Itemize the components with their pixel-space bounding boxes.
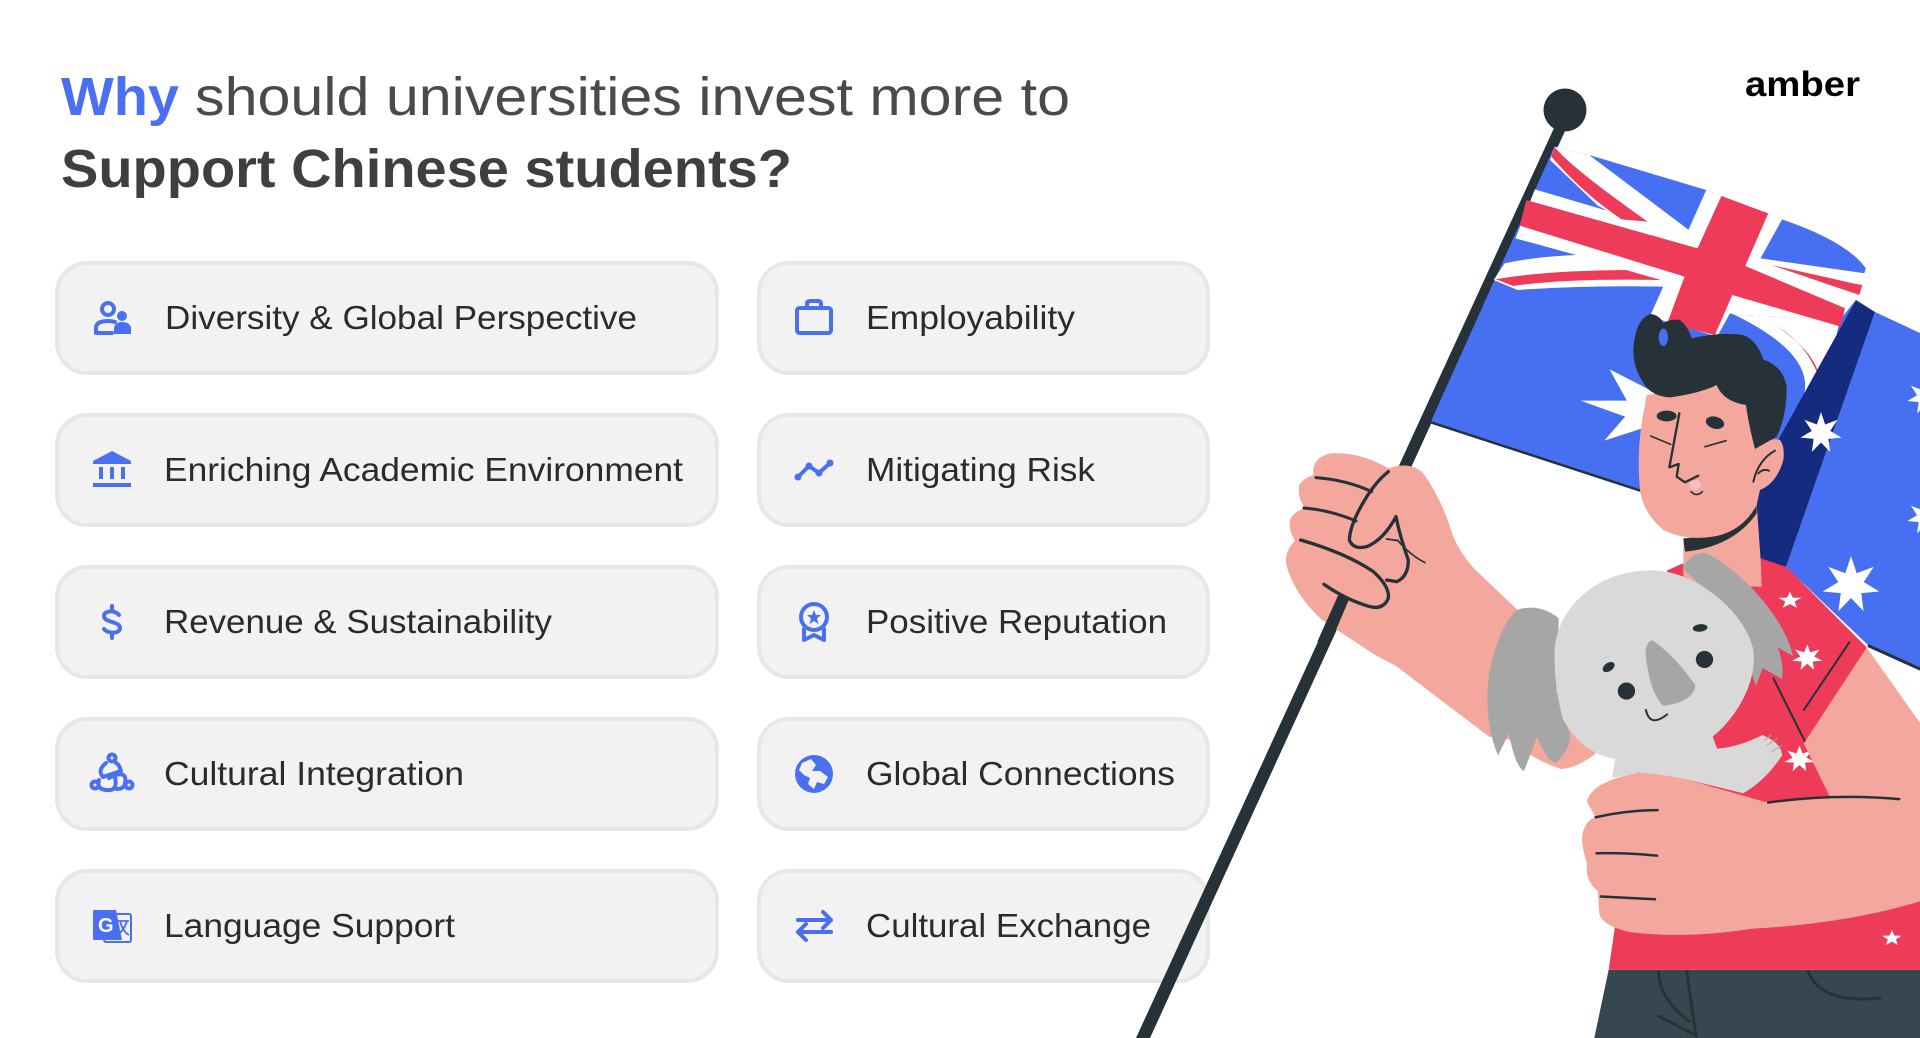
- icon: trend line: [794, 460, 834, 480]
- flag navy strip and stars: [1756, 300, 1920, 669]
- icon: award: [801, 604, 827, 640]
- head: face, hair and neck: [1633, 314, 1787, 587]
- shirt and pants: [1593, 558, 1920, 1038]
- panel: Cultural Exchange: Cultural Exchange: [866, 907, 1151, 944]
- koala: [1487, 553, 1793, 793]
- nose, wink and mouth lines: [1651, 413, 1775, 494]
- icon: globe: [795, 755, 833, 793]
- panel: Enriching Academic Environment: [57, 415, 717, 525]
- panel: Mitigating Risk: Mitigating Risk: [866, 451, 1096, 488]
- koala head and body: [1554, 570, 1782, 793]
- panel: Global Connections: Global Connections: [866, 755, 1175, 792]
- koala left ear: [1487, 608, 1570, 771]
- icon: dollar: [104, 606, 120, 638]
- panel: Cultural Integration: [57, 719, 717, 829]
- finger lines: [1301, 472, 1425, 607]
- flag main section with union jack: [1431, 147, 1866, 510]
- illustration: student with flag and koala: [1136, 88, 1920, 1038]
- panel: Revenue & Sustainability: Revenue & Sustainability: [164, 603, 553, 640]
- right arm and hand holding koala: [1582, 647, 1920, 935]
- panel: Cultural Integration: Cultural Integration: [164, 755, 464, 792]
- panel: Enriching Academic Environment: Enriching Academic Environment: [164, 451, 683, 488]
- panel: Cultural Exchange: [759, 871, 1208, 981]
- icon: exchange arrows: [798, 912, 831, 940]
- icon: knot: [92, 754, 132, 790]
- pole in front of palm: [1317, 593, 1349, 644]
- logo: amber: amber: [1745, 65, 1860, 104]
- icon: translate: G: [98, 915, 114, 937]
- title: Support Chinese students?: [61, 139, 792, 199]
- panel: Diversity & Global Perspective: [57, 263, 717, 373]
- title: Why: [61, 67, 179, 127]
- title: [61, 67, 1070, 199]
- panel: Language Support: Language Support: [164, 907, 455, 944]
- left arm and fist: [1286, 453, 1596, 769]
- koala right ear: [1682, 553, 1793, 686]
- large flag star: [1580, 369, 1656, 441]
- panel: Positive Reputation: [759, 567, 1208, 677]
- panel: Diversity & Global Perspective: Diversity & Global Perspective: [165, 299, 637, 336]
- panel: Language Support: [57, 871, 717, 981]
- hair: [1633, 314, 1787, 449]
- shirt stars: [1778, 592, 1902, 945]
- icon: translate: [93, 910, 131, 942]
- flag pole: [1136, 88, 1586, 1038]
- panel: Global Connections: [759, 719, 1208, 829]
- flag right section: [1786, 312, 1920, 668]
- panel: Mitigating Risk: [759, 415, 1208, 525]
- eyes: [1657, 411, 1726, 431]
- icon: institution: [93, 451, 131, 487]
- panel: Revenue & Sustainability: [57, 567, 717, 677]
- title: should universities invest more to: [195, 67, 1070, 127]
- icon: briefcase: [797, 301, 831, 333]
- panel: Positive Reputation: Positive Reputation: [866, 603, 1167, 640]
- panel: Employability: Employability: [866, 299, 1076, 336]
- panel: Employability: [759, 263, 1208, 373]
- icon: people: [96, 303, 131, 334]
